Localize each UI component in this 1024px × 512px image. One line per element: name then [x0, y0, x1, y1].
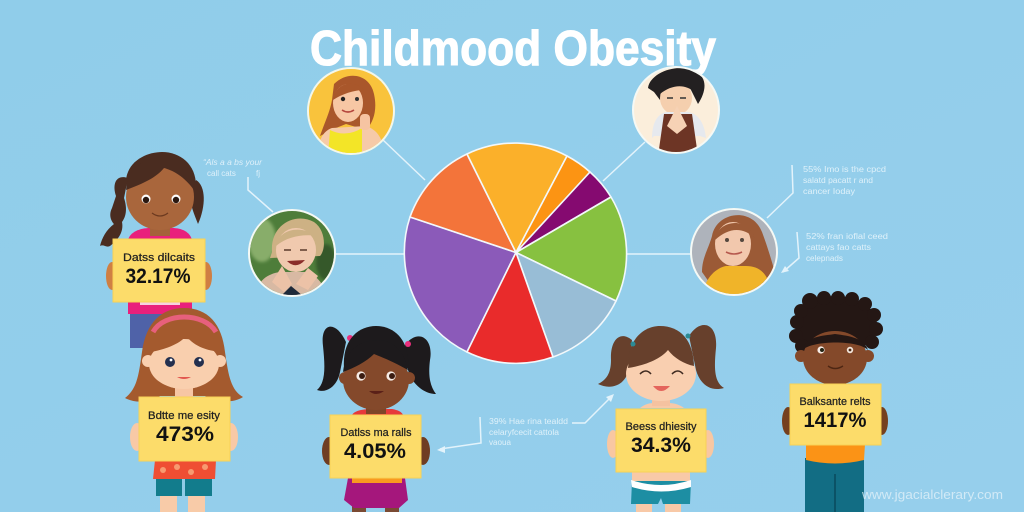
sign: Datlss ma ralls [340, 427, 412, 439]
portrait: child with brown vest [633, 67, 719, 156]
portrait: girl with yellow top [308, 68, 394, 156]
title: Childmood Obesity [310, 22, 716, 76]
sign [616, 409, 706, 472]
annotation: upper left: call cats [207, 169, 236, 178]
watermark: www.jgacialclerary.com [861, 487, 1003, 502]
annotation: lower right with arrow: 52% fran ioflal ceed [806, 232, 888, 241]
sign [330, 415, 421, 478]
curly hair and face [789, 291, 883, 388]
child: boy with curly hair [782, 291, 888, 512]
sign: 1417% [804, 409, 867, 432]
hands [782, 407, 888, 435]
slice: dark purple [516, 172, 611, 252]
body and shorts [631, 403, 691, 512]
hair and face [100, 152, 204, 247]
slice: orange [410, 154, 516, 252]
connector lines from portraits to pie [335, 140, 691, 254]
slice: blue grey [516, 252, 616, 357]
annotation: upper right: 55% Imo is the cpcd [803, 165, 886, 174]
sign: Datss dilcaits [123, 252, 196, 264]
legs and clothes [153, 460, 216, 512]
annotation: upper left [203, 158, 273, 212]
hands [322, 437, 430, 465]
sign: 34.3% [631, 434, 691, 457]
hands [130, 423, 238, 451]
child: girl with braid and pink shirt [100, 152, 212, 348]
annotation: lower right with arrow [781, 232, 888, 273]
hair and face [125, 308, 243, 402]
hair and face [317, 326, 436, 414]
slice: purple [404, 217, 516, 352]
annotation: lower right with arrow: cattays fao catts [806, 243, 871, 252]
child: smiling girl with brown pigtails [598, 325, 724, 512]
portrait: girl with long hair [691, 209, 777, 298]
annotation: upper left: “Als a a bs your [203, 158, 262, 167]
annotation: upper right: salatd pacatt r and [803, 176, 873, 185]
sign [113, 239, 205, 302]
pie chart [404, 143, 627, 363]
hands [106, 262, 212, 290]
sign: Beess dhiesity [626, 421, 697, 433]
sign: 32.17% [126, 265, 191, 288]
slice: yellow [467, 143, 567, 252]
slice: green [516, 197, 627, 301]
trousers and shirt [805, 444, 865, 512]
annotation: upper right [767, 165, 886, 218]
annotation: upper left: fj [256, 169, 260, 178]
annotation: bottom centre with arrows [437, 394, 614, 453]
annotation: bottom centre with arrows: 39% Hae rina tealdd [489, 417, 568, 426]
sign [139, 397, 230, 461]
annotation: upper right: cancer Ioday [803, 187, 855, 196]
sign: 4.05% [344, 440, 406, 463]
sign: Bdtte me esity [148, 410, 221, 422]
hair and face [598, 325, 724, 406]
slice: bright orange [516, 156, 590, 252]
hands [607, 430, 714, 458]
annotation: lower right with arrow: celepnads [806, 254, 843, 263]
portrait: blond boy [248, 210, 336, 300]
child: girl with headband [125, 308, 243, 512]
annotation: bottom centre with arrows: celaryfcecit cattola [489, 428, 560, 437]
sign: 473% [156, 423, 214, 446]
legs and shirt [128, 228, 192, 348]
sign: Balksante relts [800, 396, 871, 408]
child: girl with black pigtails [317, 326, 436, 512]
sign [790, 384, 881, 445]
annotation: bottom centre with arrows: vaoua [489, 438, 512, 447]
slice: red [467, 252, 553, 363]
legs and skirt [344, 409, 408, 512]
